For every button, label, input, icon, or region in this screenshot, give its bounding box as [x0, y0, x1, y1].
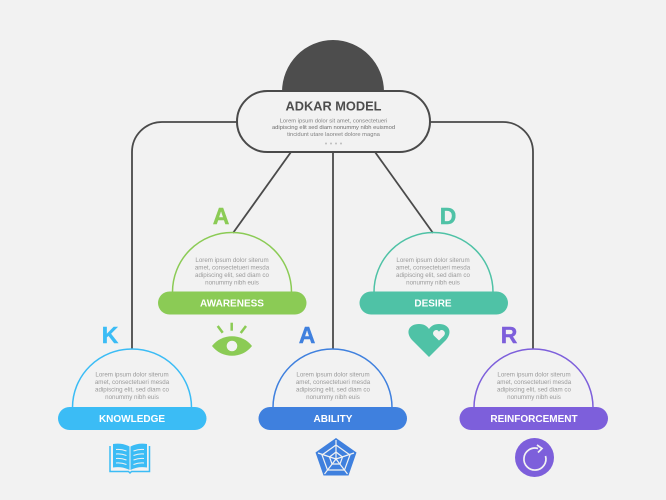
body text: amet, consectetueri mesda: [497, 379, 572, 386]
panel: knowledge: [58, 322, 206, 473]
body text: Lorem ipsum dolor siterum: [497, 372, 571, 378]
title: ADKAR MODEL: [286, 98, 382, 114]
header text: tincidunt utare laoreet dolore magna: [287, 132, 381, 138]
label bar: [360, 292, 508, 314]
body text: [195, 257, 270, 286]
panel: reinforcement: [460, 322, 608, 477]
body text: amet, consectetueri mesda: [396, 264, 471, 272]
dome: [474, 349, 593, 408]
connector lines: [132, 122, 533, 349]
body text: [497, 372, 572, 401]
body text: adipiscing elit, sed diam co: [396, 272, 471, 279]
dark semicircle: [282, 40, 384, 92]
pagination dots: [325, 142, 342, 144]
label bar: [58, 407, 206, 430]
header text: [272, 118, 395, 138]
icon: book: [110, 444, 150, 473]
body text: nonummy nibh euis: [205, 280, 259, 286]
body text: amet, consectetueri mesda: [95, 379, 170, 386]
letter A: A: [299, 322, 315, 348]
header text: Lorem ipsum dolor sit amet, consectetueri: [280, 118, 387, 124]
panel: desire: [360, 203, 508, 357]
label bar: [158, 292, 306, 314]
header: ADKAR model: [237, 40, 430, 152]
body text: Lorem ipsum dolor siterum: [95, 372, 169, 378]
body text: adipiscing elit, sed diam co: [195, 272, 270, 279]
body text: [95, 372, 170, 401]
dome: [172, 233, 292, 292]
label: KNOWLEDGE: [99, 414, 165, 425]
dome: [374, 233, 493, 292]
body text: adipiscing elit, sed diam co: [296, 386, 371, 394]
header pill: [237, 91, 430, 152]
dome: [72, 349, 192, 408]
body text: nonummy nibh euis: [105, 394, 159, 401]
label bar: [460, 407, 608, 430]
dome: [273, 349, 392, 408]
letter A: A: [213, 203, 229, 229]
body text: amet, consectetueri mesda: [296, 379, 371, 386]
label: ABILITY: [314, 414, 353, 425]
header text: adipiscing elit sed diam nonummy nibh euismod: [272, 125, 395, 131]
body text: Lorem ipsum dolor siterum: [396, 257, 470, 264]
body text: nonummy nibh euis: [406, 280, 460, 286]
label: DESIRE: [414, 298, 452, 310]
icon: eye: [212, 323, 252, 356]
panel: awareness: [158, 203, 306, 356]
body text: nonummy nibh euis: [306, 394, 360, 401]
body text: [296, 372, 371, 401]
body text: adipiscing elit, sed diam co: [497, 386, 572, 394]
body text: Lorem ipsum dolor siterum: [296, 372, 370, 378]
label: REINFORCEMENT: [490, 414, 578, 425]
panel: ability: [258, 322, 407, 476]
icon: pentagon web: [316, 438, 356, 476]
label bar: [258, 407, 407, 430]
label: AWARENESS: [200, 298, 264, 310]
body text: amet, consectetueri mesda: [195, 264, 270, 272]
body text: Lorem ipsum dolor siterum: [195, 257, 269, 264]
letter D: D: [440, 203, 456, 229]
icon: heart: [408, 324, 450, 357]
icon: refresh: [515, 438, 554, 477]
body text: adipiscing elit, sed diam co: [95, 386, 170, 394]
body text: [396, 257, 471, 286]
letter R: R: [501, 322, 518, 348]
body text: nonummy nibh euis: [507, 394, 561, 401]
letter K: K: [102, 322, 119, 348]
